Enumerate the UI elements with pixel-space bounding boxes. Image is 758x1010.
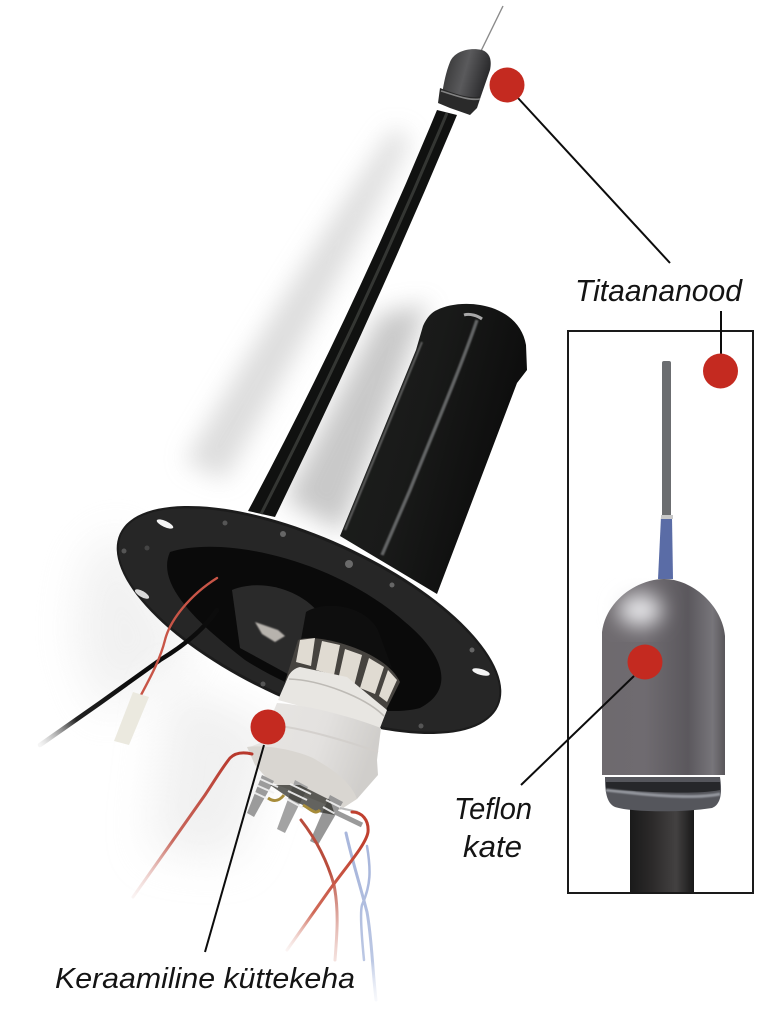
wires from the heating element — [133, 753, 376, 1000]
leader line: heating element — [205, 745, 264, 952]
anode rod with tip — [248, 6, 503, 517]
titanium wire — [662, 361, 671, 520]
anode cap — [442, 49, 491, 102]
soft shadows behind the part — [75, 128, 428, 860]
collar — [605, 777, 721, 811]
label: teflon coating — [454, 791, 532, 864]
red marker — [628, 644, 662, 680]
blue teflon sleeve — [658, 517, 673, 579]
long black rod — [248, 110, 457, 517]
leader line — [521, 676, 634, 785]
rough sealing plate — [247, 746, 357, 810]
mounting flange — [86, 459, 532, 781]
label: ceramic heating element: Keraamiline küttekeha — [55, 963, 355, 995]
white connector — [114, 692, 149, 745]
red marker: heating element — [250, 710, 286, 744]
ceramic collar — [278, 667, 387, 728]
tube left edge highlight — [345, 342, 422, 530]
dome highlight — [618, 594, 662, 626]
large black tube — [340, 304, 527, 594]
inset: anode close-up — [521, 331, 753, 893]
small metal fitting — [255, 622, 285, 642]
flange inner recess — [167, 547, 441, 711]
anode cap collar — [438, 88, 481, 115]
ceramic heating element — [247, 606, 400, 845]
label: teflon coating: kate — [463, 829, 522, 864]
wires from the flange with connector — [40, 578, 217, 745]
titanium wire tip — [481, 6, 503, 51]
terminal bolts — [247, 775, 362, 845]
label: teflon coating: Teflon — [454, 791, 532, 826]
ceramic body — [247, 703, 381, 799]
leader line: anode — [518, 98, 670, 263]
red marker: anode — [490, 68, 524, 102]
ceramic fins — [285, 638, 400, 712]
metallic dome — [602, 579, 725, 775]
dark mounting neck — [300, 606, 392, 668]
leader line: label to inset marker — [720, 311, 722, 356]
inset frame — [568, 331, 753, 893]
tube main highlight — [382, 320, 477, 555]
red marker: inset — [703, 354, 738, 388]
flange holes — [156, 517, 174, 531]
lower black rod — [630, 806, 694, 892]
label: anode: Titaananood — [575, 273, 744, 308]
